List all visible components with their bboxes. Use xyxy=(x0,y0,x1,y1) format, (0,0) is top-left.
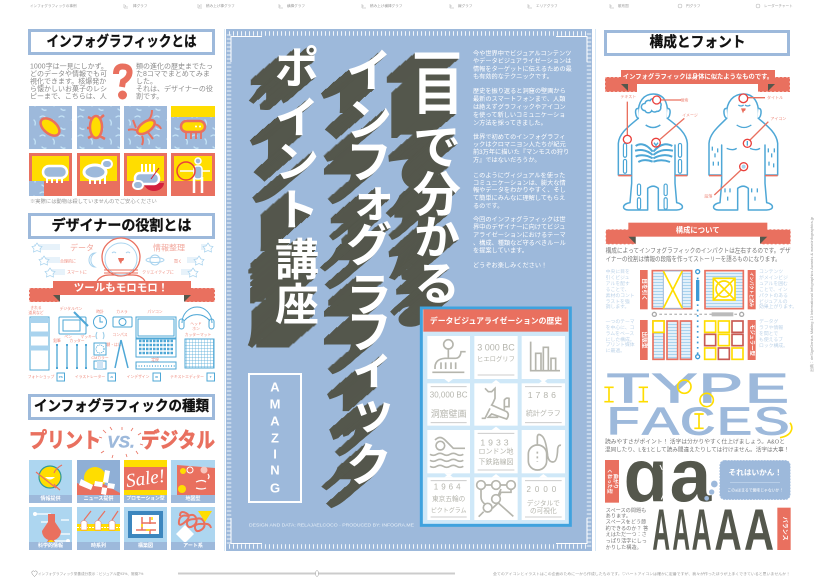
tools illustrations: 道具など xyxy=(28,310,44,315)
figure: hairy body: 段落 xyxy=(704,192,712,198)
cell: 1933 london underground: 1933 xyxy=(480,437,512,447)
heading: print vs digital: VS. xyxy=(107,432,135,452)
layout description: イナーの役割は情報の段階を作ってストーリーを語るものになります。 xyxy=(606,254,781,263)
intro text right: した。 xyxy=(136,78,157,86)
main title: vertical extruded lettering: 分 xyxy=(413,155,461,225)
intro copy in center panel: 方』ではないだろうか。 xyxy=(473,156,541,164)
spacing text: えはただ一つ：さ xyxy=(606,531,647,538)
banner: tools xyxy=(29,281,215,302)
tag: curved: くねった型 xyxy=(606,469,613,494)
type tile: structure diagram xyxy=(124,507,167,550)
heading: 構成とフォント xyxy=(606,32,788,54)
intro copy in center panel: 情報をターゲットに伝えるための最 xyxy=(473,65,572,73)
cell: 30000 BC cave painting: 洞窟壁画 xyxy=(431,408,467,419)
history header: データビジュアライゼーションの歴史 xyxy=(430,315,562,325)
type tile: timeline: 時系列 xyxy=(91,542,106,549)
main title: vertical extruded lettering: フ xyxy=(346,296,392,362)
intro copy in center panel: アライゼーションにおけるテーマ xyxy=(473,231,566,239)
main title: vertical extruded lettering: で xyxy=(413,108,461,178)
intro text right: た8コマでまとめてみま xyxy=(136,70,210,78)
bottom note left with heart: インフォグラフィック栄養成分表示：ビジュアル愛93%、常識7% xyxy=(38,571,144,576)
bottom note right with heart: 全てのアイコンとイラストはこの企画のために一から作成したものです。♡ハートアイコンは確かに定番ですが、我々が作ったほうが上手くできていると思いませんか！ xyxy=(493,571,790,576)
heading: print vs digital: デジタル xyxy=(141,428,215,452)
layout side notes: データグ xyxy=(759,318,778,325)
display heading: type faces xyxy=(604,366,792,447)
callout: not acceptable xyxy=(720,461,790,499)
figure: skeleton body xyxy=(618,93,698,210)
icon: question mark xyxy=(116,66,130,100)
layout side notes: ラムをベース xyxy=(606,330,634,337)
layout side notes: ュアルを囲む xyxy=(759,280,788,287)
tools illustrations: カッターマット xyxy=(185,332,211,337)
software row: PS xyxy=(59,375,63,379)
panel: history of data visualization xyxy=(421,308,570,525)
banner: 構成について: 構成について xyxy=(676,225,720,234)
intro text left: ら懐かしいお菓子のレシ xyxy=(30,84,107,93)
layout side notes: プリント媒体 xyxy=(606,341,635,348)
cell: computer mouse icon xyxy=(522,430,565,473)
cell: 1786 statistical graph: 統計グラフ xyxy=(526,408,561,417)
software row: T xyxy=(210,375,212,379)
figure: skeleton body: 検索 xyxy=(680,96,688,102)
tools illustrations: ヘッド xyxy=(190,322,202,326)
figure: hairy body: タイトル xyxy=(767,94,783,100)
typography text: 読みやすさがポイント！ 活字は分かりやすく仕上げましょう。A&Oと xyxy=(605,438,785,446)
spacing text: 約できるのか？ 答 xyxy=(606,524,649,532)
tools illustrations: デジタルペン xyxy=(60,306,83,311)
top navigation of chart types: 線グラフ xyxy=(458,3,473,8)
layout side notes: を中心に、コ xyxy=(606,324,635,331)
spacing text: スペースの問題も xyxy=(606,507,646,514)
data and organisation words: スマートに xyxy=(67,270,87,274)
layout diagrams xyxy=(652,270,744,359)
figure: hairy body xyxy=(704,94,786,210)
amazing box: G xyxy=(270,480,280,496)
intro copy in center panel: も有効的なテクニックです。 xyxy=(473,72,553,80)
layout side notes: ることで、 xyxy=(606,287,629,293)
data and organisation words: 情報整理 xyxy=(153,242,185,252)
software row: ID xyxy=(155,375,159,379)
large letters AAAAA: A xyxy=(652,498,670,563)
heading: デザイナーの役割とは: デザイナーの役割とは xyxy=(52,216,192,234)
layout description: 構成によってインフォグラフィックのインパクトは左右するのです。デザ xyxy=(606,245,791,254)
type tile: news xyxy=(77,460,120,503)
main title: vertical extruded lettering: 座 xyxy=(275,269,319,333)
intro copy in center panel: を使って新しいコミュニケーショ xyxy=(473,111,565,119)
main title: vertical extruded lettering: ン xyxy=(275,126,319,190)
type tile: map xyxy=(171,460,215,503)
intro copy in center panel: ン方法を採ってきました。 xyxy=(473,119,547,127)
type tile: information: 情報提供 xyxy=(40,495,61,502)
footnote: ※実際には動物は殺していませんのでご安心ください xyxy=(30,197,157,205)
cell: 1933 london underground xyxy=(474,427,518,473)
figure: skeleton body: イメージ xyxy=(682,112,698,117)
heading: インフォグラフィックの種類 xyxy=(30,396,214,418)
cell: 1964 tokyo olympics pictograms: 東京五輪の xyxy=(432,494,466,503)
type tile: map: 地図型 xyxy=(185,495,201,502)
banner: body analogy: インフォグラフィックは身体に似たようなものです。 xyxy=(623,72,773,80)
typography text xyxy=(605,438,789,454)
large letters AAAAA: A xyxy=(714,498,742,563)
amazing box: M xyxy=(270,396,280,412)
cell: waves and boat icon xyxy=(427,430,470,477)
type tile: scientific: 科学的情報 xyxy=(38,542,63,549)
type tile: promotion: プロモーション型 xyxy=(126,494,165,502)
data and organisation words: 合理的に xyxy=(60,258,76,264)
cell: 30000 BC cave painting: 30,000 BC xyxy=(430,390,468,399)
intro copy in center panel: ックはクロマニヨン人たちが紀元 xyxy=(473,140,566,148)
layout side notes: を間とで xyxy=(759,330,778,337)
cell: network icon xyxy=(474,474,518,520)
cell: 2000 digital visualization xyxy=(522,474,565,520)
layout tags: 目を引く xyxy=(641,278,649,301)
cell: bar chart icon xyxy=(522,336,565,382)
layout side notes: ことで、イン xyxy=(759,287,788,293)
layout tags xyxy=(640,270,757,360)
heading: デザイナーの役割とは xyxy=(30,214,214,238)
amazing box: N xyxy=(270,462,280,478)
intro copy in center panel: 今や世界中でビジュアルコンテンツ xyxy=(473,50,571,58)
tag: curved: 曲がり xyxy=(612,474,619,489)
top navigation of chart types: エリアグラフ xyxy=(536,3,558,8)
main title: vertical extruded lettering: 一 xyxy=(413,18,461,88)
cell: 1964 tokyo olympics pictograms xyxy=(427,474,470,520)
main title: vertical extruded lettering: グ xyxy=(346,209,392,275)
layout side notes: ロック構成。 xyxy=(759,342,788,349)
intro copy in center panel: 今回のインフォグラフィックは世 xyxy=(473,216,566,224)
software row: AI xyxy=(110,375,113,379)
intro text right: それは、デザイナーの役 xyxy=(136,84,213,93)
banner: tools: ツールもモロモロ！ xyxy=(74,282,168,294)
tools illustrations: 鉛筆 xyxy=(53,338,61,343)
top navigation of chart types: レーダーチャート xyxy=(764,3,793,8)
large letters AAAAA: A xyxy=(744,498,774,563)
center panel background xyxy=(224,29,596,551)
intro copy in center panel: 世界で初めてのインフォグラフィ xyxy=(473,133,566,141)
main title: vertical extruded lettering: ク xyxy=(346,429,392,495)
cell: 1964 tokyo olympics pictograms: ピクトグラム xyxy=(431,507,467,515)
layout side notes: 中央に目を xyxy=(606,268,630,275)
layout side notes: 効果上がります。 xyxy=(759,303,797,310)
intro text left: 1000字は一見にしかず。 xyxy=(30,62,108,70)
cell: 30000 BC cave painting xyxy=(427,383,470,426)
main title: vertical extruded lettering: イ xyxy=(275,82,319,146)
layout side notes: アルを配す xyxy=(606,280,630,287)
top navigation of chart types: インフォグラフィックの事例 xyxy=(30,3,77,8)
layout side notes: 調します。 xyxy=(606,304,629,310)
layout side notes: に最適。 xyxy=(606,347,625,354)
intro text left xyxy=(30,62,108,100)
software row: インデザイン xyxy=(127,374,150,379)
heading: 構成とフォント: 構成とフォント xyxy=(650,33,746,51)
intro text left: 視化できます。核爆発か xyxy=(30,76,106,86)
tools illustrations: パソコン xyxy=(147,309,163,314)
main title: vertical extruded lettering: ィ xyxy=(350,331,396,397)
cell: 3000 BC hieroglyph: 3 000 BC xyxy=(477,343,515,353)
heading: print vs digital xyxy=(29,427,215,458)
evolution tiles row 1 xyxy=(29,106,215,149)
cell: egyptian cat icon xyxy=(474,380,518,426)
cell: mammoth hunting icon xyxy=(427,336,470,382)
bottom slider xyxy=(178,570,455,576)
figure: skeleton body: テキスト xyxy=(620,93,636,99)
section: about layout xyxy=(606,223,797,360)
type tile: information xyxy=(29,460,72,503)
tools illustrations xyxy=(28,305,214,370)
banner: 構成について xyxy=(606,223,791,244)
panel: composition and fonts xyxy=(604,32,797,563)
layout side notes: も使えるブ xyxy=(759,336,783,343)
layout side notes: コンテンツ xyxy=(759,269,783,275)
intro copy in center panel: 最新のスマートフォンまで、人類 xyxy=(473,95,566,103)
software row: イラストレーター xyxy=(75,374,105,379)
main title: vertical extruded lettering: ト xyxy=(275,174,319,238)
top navigation of chart types: 横棒グラフ xyxy=(287,3,305,8)
cell: 1786 statistical graph xyxy=(522,380,565,426)
cell: 1933 london underground: 下鉄路線図 xyxy=(479,457,513,466)
layout side notes: 引くビジュ xyxy=(606,274,630,281)
intro copy in center panel: やデータビジュアライゼーションは xyxy=(473,57,571,65)
main title: vertical extruded lettering: イ xyxy=(346,35,392,101)
intro copy in center panel: このようにヴィジュアルを使った xyxy=(473,172,565,180)
main title: vertical extruded lettering: 講 xyxy=(275,224,319,288)
spacing text: あります。 xyxy=(606,513,631,520)
tools illustrations: カッター xyxy=(69,338,85,343)
type tile: promotion: Sale! xyxy=(125,466,166,492)
large letters AAAAA xyxy=(652,498,774,563)
intro copy in center panel: 報やデータをわかりやすく、そし xyxy=(473,186,566,194)
intro text right: 類の進化の歴史までたっ xyxy=(136,62,213,70)
spacing text xyxy=(606,507,649,551)
data and organisation words xyxy=(32,242,213,277)
layout tags: インパクトと読み xyxy=(748,272,755,308)
main title: vertical extruded lettering: ッ xyxy=(350,376,396,442)
large letters AAAAA: A xyxy=(692,498,712,563)
software row xyxy=(28,373,214,381)
intro copy in center panel xyxy=(473,50,572,270)
type tile: timeline xyxy=(77,507,120,550)
tools illustrations: 糊・はし xyxy=(106,342,122,347)
tools illustrations: 時計 xyxy=(96,309,104,314)
intro text right xyxy=(136,62,213,100)
layout tags: モジュラー型 xyxy=(749,324,757,356)
tools illustrations: マッキー xyxy=(80,334,96,339)
history header xyxy=(423,309,568,332)
data and organisation words: クリエイティブに xyxy=(142,268,174,274)
software row: テキストエディター xyxy=(170,374,204,379)
layout side notes: ビジュアルの xyxy=(759,298,788,305)
main title: vertical extruded lettering: ポ xyxy=(275,32,319,96)
icon: astronaut xyxy=(97,238,145,281)
banner: body analogy xyxy=(605,70,790,92)
cell: 1786 statistical graph: 1786 xyxy=(528,390,559,400)
type tile: art: アート系 xyxy=(183,542,203,549)
data and organisation words: データ xyxy=(70,242,94,252)
callout: not acceptable: それはいかん！ xyxy=(729,468,782,477)
credit line: DESIGN AND DATA: RELAJAELCOCO · PRODUCED BY: INFOGRA.ME xyxy=(249,522,414,528)
main title: vertical extruded lettering: フ xyxy=(346,126,392,192)
top navigation of chart types: 積み上げ横棒グラフ xyxy=(370,3,403,8)
amazing box: Z xyxy=(271,430,279,446)
layout side notes: 一つのテーマ xyxy=(606,319,635,325)
cell: 1964 tokyo olympics pictograms: 1964 xyxy=(434,482,464,491)
layout side notes: パクトのある xyxy=(759,293,788,299)
tag: balance: バランス xyxy=(781,517,788,541)
intro copy in center panel: 歴史を振り返ると洞窟の壁画から xyxy=(473,87,566,95)
spacing text: っぱり活字にしっ xyxy=(606,537,647,545)
layout side notes: ラストを強 xyxy=(606,298,630,305)
amazing box: I xyxy=(273,446,277,462)
top navigation of chart types: 散布図 xyxy=(618,3,629,8)
cell: 2000 digital visualization: の可視化 xyxy=(530,506,557,515)
large letters aa: a xyxy=(670,434,712,518)
layout side notes: 素材のコント xyxy=(606,292,635,299)
heading: インフォグラフィックとは: インフォグラフィックとは xyxy=(46,32,197,50)
main title: vertical extruded lettering: る xyxy=(414,248,460,314)
top navigation of chart types: 棒グラフ xyxy=(133,3,148,8)
top navigation of chart types xyxy=(30,3,793,8)
intro text left: どのデータや情報でも可 xyxy=(30,69,107,78)
panel: the designer's role xyxy=(28,214,215,381)
typography section xyxy=(604,366,792,563)
tools illustrations: カメラ xyxy=(116,309,128,314)
cell: 2000 digital visualization: 2000 xyxy=(526,485,560,494)
amazing box: A xyxy=(270,414,280,428)
callout: not acceptable: このaはまるで意味じゃないか！ xyxy=(727,488,783,493)
top navigation of chart types: 積み上げ棒グラフ xyxy=(206,3,235,8)
bottom note left with heart xyxy=(32,571,144,576)
cell: 3000 BC hieroglyph xyxy=(474,336,518,379)
display heading: type faces: TYPE xyxy=(605,366,790,416)
intro text right: 割です。 xyxy=(136,92,163,100)
software row: フォトショップ xyxy=(28,374,54,379)
intro copy in center panel: 、構成、種類など守るべきルール xyxy=(473,239,566,247)
intro copy in center panel: は絶えずグラフィックやアイコン xyxy=(473,103,566,111)
large letters aa: ɑ xyxy=(624,434,668,518)
main title: vertical extruded lettering: ォ xyxy=(350,164,396,230)
cell: 3000 BC hieroglyph: ヒエログリフ xyxy=(477,354,515,363)
layout side notes: にした構成。 xyxy=(606,336,635,343)
heading: インフォグラフィックとは xyxy=(30,30,214,54)
layout description xyxy=(606,245,791,263)
main title: vertical extruded lettering: 目 xyxy=(412,50,464,125)
intro copy in center panel: を提案しています。 xyxy=(473,246,528,254)
evolution tiles row 2 xyxy=(29,153,215,196)
type tile: structure diagram: 構築図 xyxy=(138,542,153,549)
tools illustrations: ペン xyxy=(64,335,72,339)
typography text: 混同したり、Lを1として読み間違えたりしては行けません。活字は大事！ xyxy=(605,446,789,454)
type tile: scientific xyxy=(29,507,72,550)
tools illustrations: ホン xyxy=(192,326,200,331)
panel: types of infographic xyxy=(29,396,215,550)
intro copy in center panel: 前3万年に描いた『マンモスの狩り xyxy=(473,148,569,156)
spacing text: かりした構造。 xyxy=(606,543,642,551)
figure: hairy body: アイコン xyxy=(770,116,786,121)
heading: print vs digital: プリント xyxy=(29,430,101,452)
layout tags: 出版型 xyxy=(641,332,649,349)
spacing text: スペースをどう節 xyxy=(606,518,646,526)
tools illustrations: CMカラー xyxy=(91,355,109,360)
layout side notes: がメインビジ xyxy=(759,274,788,281)
intro text left: ピーまで、こちらは、人 xyxy=(30,92,107,100)
intro copy in center panel: コミュニケーションは、膨大な情 xyxy=(473,179,566,187)
large letters AAAAA: A xyxy=(672,498,690,563)
intro copy in center panel: 界中のデザイナーに向けてビジュ xyxy=(473,223,565,231)
cell: 1933 london underground: ロンドン地 xyxy=(479,446,513,455)
main title: vertical extruded lettering: ン xyxy=(346,84,392,150)
main title: vertical extruded lettering: か xyxy=(414,202,460,268)
panel: what is an infographic xyxy=(29,30,215,205)
display heading: type faces: FACES xyxy=(605,401,790,447)
amazing box: A xyxy=(270,380,280,394)
large letters aa xyxy=(624,434,718,518)
tools illustrations: 定規 xyxy=(151,357,159,362)
layout side notes: ラフや情報 xyxy=(759,324,783,331)
main title: vertical extruded lettering: ラ xyxy=(346,259,392,325)
type tile: news: ニュース提供 xyxy=(84,495,113,502)
type tile: art xyxy=(171,507,215,550)
tag: balance xyxy=(777,508,791,550)
amazing box xyxy=(249,374,301,502)
intro copy in center panel: るのです。 xyxy=(473,203,503,210)
layout side notes xyxy=(606,268,797,354)
tag: curved xyxy=(605,460,619,503)
side credit: 出典：deSignGenius Making 13 International Infographics Awards & www.infographics.jp xyxy=(809,217,814,372)
type tile: promotion xyxy=(124,460,167,503)
heading: インフォグラフィックの種類: インフォグラフィックの種類 xyxy=(34,397,209,415)
top navigation of chart types: 円グラフ xyxy=(686,3,701,8)
tools illustrations: コンパス xyxy=(112,332,128,337)
data and organisation words: 賢く xyxy=(174,258,182,264)
cell: 2000 digital visualization: デジタルで xyxy=(527,498,560,507)
tools illustrations: きれる xyxy=(30,305,42,310)
intro copy in center panel: どうぞお楽しみください！ xyxy=(473,262,547,270)
intro copy in center panel: て簡単にみんなに理解してもらえ xyxy=(473,194,565,202)
